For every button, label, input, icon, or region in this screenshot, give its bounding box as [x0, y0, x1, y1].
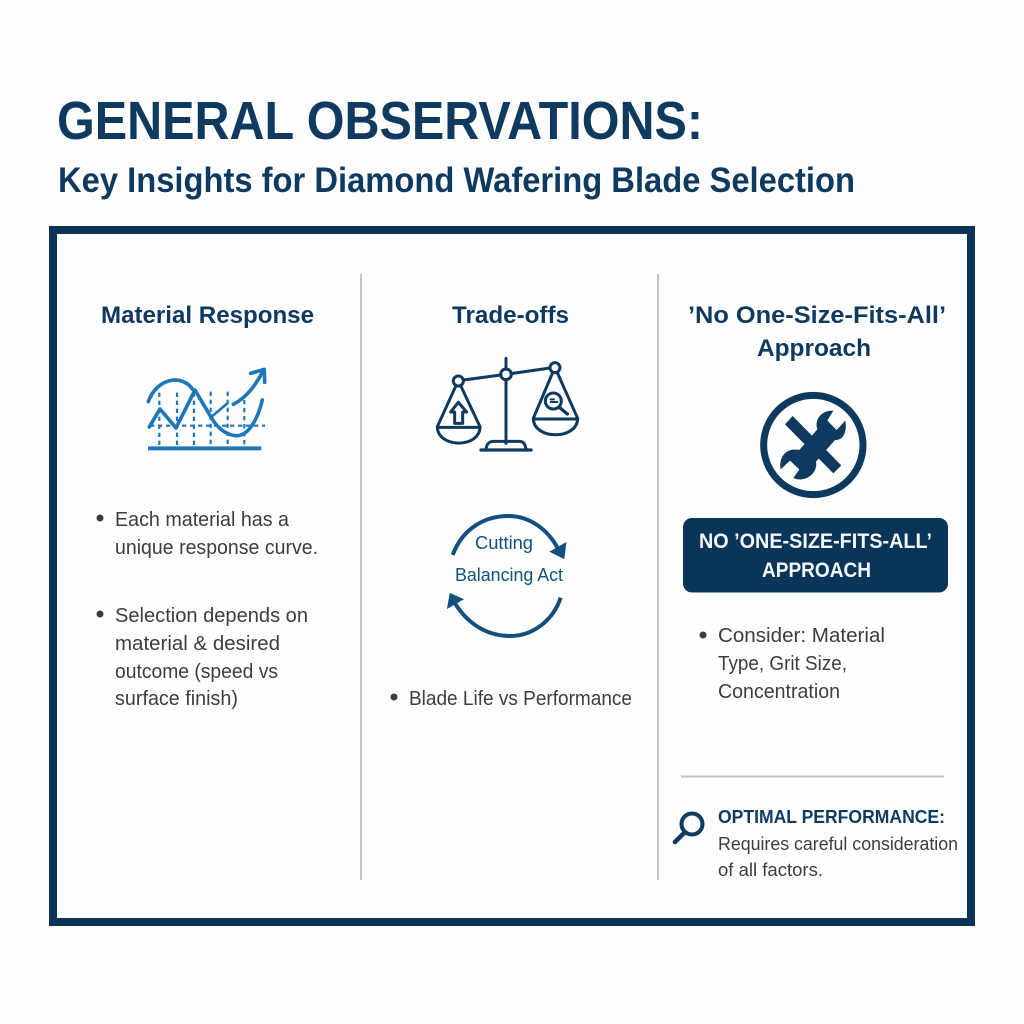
- subtitle: Key Insights for Diamond Wafering Blade Selection: [58, 161, 855, 200]
- bullet: selection: surface finish): [115, 687, 238, 710]
- icon: balance scale: [437, 358, 578, 450]
- bullet: consider: [700, 624, 885, 703]
- bullet: selection: material & desired: [115, 632, 280, 655]
- bullet: response curve: unique response curve.: [115, 536, 318, 559]
- callout banner: [683, 518, 948, 592]
- label: balancing act: Balancing Act: [455, 564, 563, 585]
- main frame: [53, 230, 971, 922]
- callout banner: APPROACH: [762, 559, 871, 582]
- bullet: selection: [96, 604, 308, 710]
- panel: no one-size-fits-all: [675, 302, 958, 880]
- bullet: consider: Consider: Material: [718, 624, 885, 647]
- optimal performance note: of all factors.: [718, 859, 823, 880]
- icon: magnifier: [675, 814, 702, 842]
- title: GENERAL OBSERVATIONS:: [57, 91, 703, 151]
- label: cutting: Cutting: [475, 532, 533, 553]
- icon: crossed tools: [764, 395, 863, 495]
- panel: trade-offs: [390, 302, 632, 710]
- optimal performance note: OPTIMAL PERFORMANCE:: [718, 806, 945, 827]
- bullet: blade life: Blade Life vs Performance: [409, 687, 632, 710]
- panel: material response: [96, 302, 318, 710]
- bullet: selection: Selection depends on: [115, 604, 308, 627]
- bullet: response curve: [96, 508, 318, 559]
- optimal performance note: [718, 806, 958, 880]
- callout banner: NO ’ONE-SIZE-FITS-ALL’: [699, 530, 932, 553]
- bullet: consider: Concentration: [718, 680, 840, 703]
- heading: approach: Approach: [757, 335, 871, 362]
- heading: approach: ’No One-Size-Fits-All’: [688, 302, 946, 329]
- heading: trade-offs: Trade-offs: [452, 302, 569, 329]
- bullet: response curve: Each material has a: [115, 508, 290, 531]
- heading: approach: [688, 302, 946, 362]
- optimal performance note: Requires careful consideration: [718, 833, 958, 854]
- icon: balancing act cycle: [447, 516, 566, 636]
- icon: response chart: [148, 369, 265, 448]
- bullet: consider: Type, Grit Size,: [718, 652, 847, 675]
- bullet: selection: outcome (speed vs: [115, 660, 278, 683]
- heading: material response: Material Response: [101, 302, 314, 329]
